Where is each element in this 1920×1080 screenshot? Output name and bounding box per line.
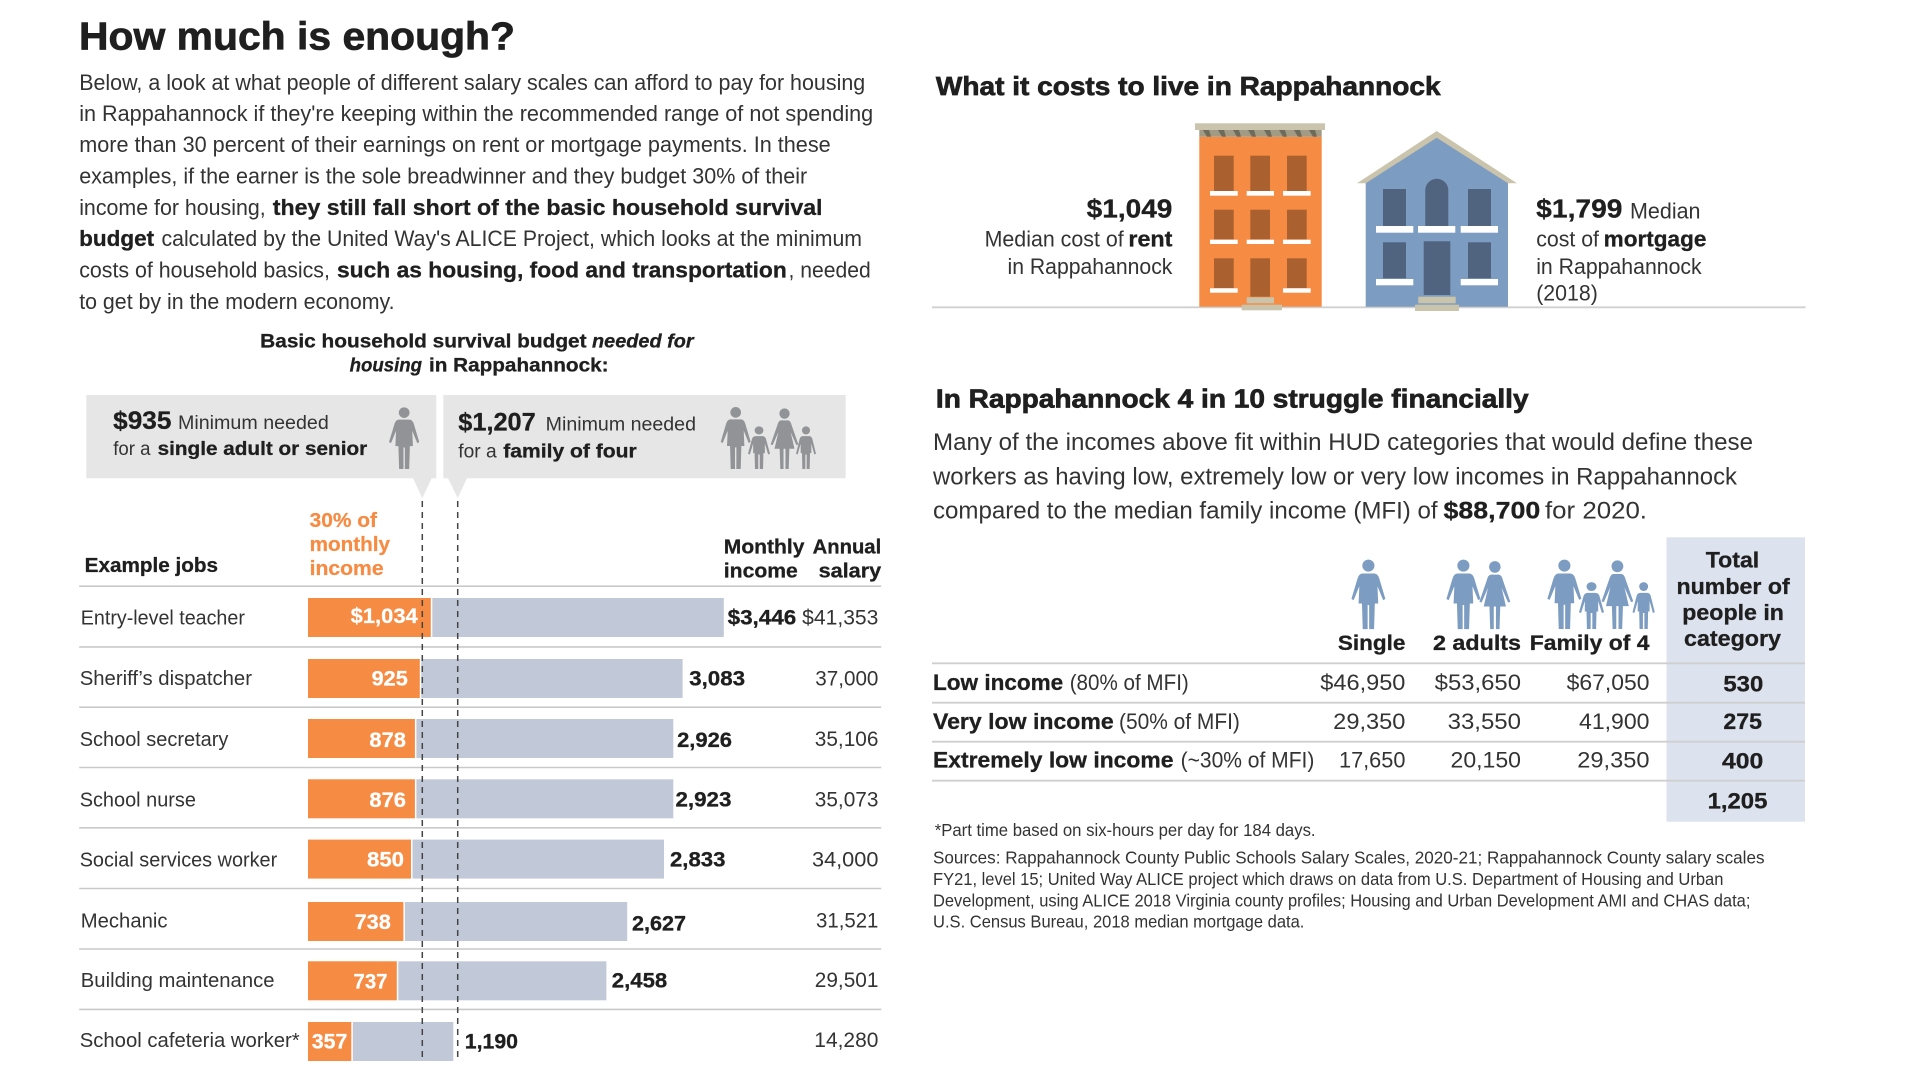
text block: HUD categories: $88,700 — [1444, 497, 1540, 524]
heading: survival budget: needed for — [592, 331, 695, 352]
column header: total people: category — [1684, 626, 1782, 651]
label: median rent: $1,049 — [1087, 194, 1172, 224]
column headers: Single — [1338, 632, 1405, 655]
row: low income: 530 — [1723, 672, 1763, 697]
label: median mortgage: in Rappahannock — [1536, 254, 1703, 279]
label: family of four: family of four — [503, 442, 637, 463]
row: very low income: 33,550 — [1448, 709, 1521, 734]
heading: survival budget — [260, 331, 695, 377]
row: mechanic: Mechanic — [81, 909, 168, 932]
title: How much is enough? — [79, 16, 515, 58]
row: school nurse — [80, 779, 878, 818]
row: entry-level teacher: $41,353 — [802, 607, 878, 630]
row: sheriff's dispatcher: 3,083 — [689, 668, 745, 691]
heading: survival budget: in Rappahannock: — [429, 356, 608, 377]
footnote: *Part time based on six-hours per day for 184 days. — [935, 820, 1316, 840]
label: median mortgage — [1536, 194, 1706, 306]
sources: Sources: Rappahannock County Public Schools Salary Scales, 2020-21; Rappahannock County salary scales — [933, 847, 1765, 867]
text block: introduction: examples, if the earner is the sole breadwinner and they budget 30% of their — [79, 164, 807, 188]
sources: FY21, level 15; United Way ALICE project which draws on data from U.S. Department of Housing and Urban — [933, 869, 1723, 889]
row: low income: Low income — [933, 670, 1063, 695]
value: 1207 dollars: $1,207 — [458, 409, 536, 437]
row: sheriff's dispatcher: 925 — [372, 668, 408, 691]
icon: orange apartment building — [1195, 123, 1325, 310]
row: sheriff's dispatcher: Sheriff’s dispatcher — [80, 667, 252, 690]
bar chart: example jobs — [79, 501, 882, 1061]
table header: 30% of — [310, 509, 377, 532]
row: low income: (80% of MFI) — [1070, 670, 1189, 695]
row: sheriff's dispatcher — [80, 659, 878, 698]
sources: Development, using ALICE 2018 Virginia county profiles; Housing and Urban Development AMI and CHAS data; — [933, 891, 1750, 911]
column headers — [1338, 632, 1650, 655]
table: income categories — [932, 537, 1805, 822]
row: mechanic — [81, 902, 878, 941]
row: extremely low income: 400 — [1722, 749, 1763, 774]
sources: U.S. Census Bureau, 2018 median mortgage data. — [933, 912, 1304, 932]
row: very low income — [933, 709, 1762, 734]
sources — [933, 847, 1765, 932]
row: low income — [933, 670, 1763, 697]
label: single adult: for a — [113, 439, 151, 460]
column header: total people — [1676, 547, 1790, 651]
table header — [85, 509, 882, 583]
text block: HUD categories: Many of the incomes above fit within HUD categories that would define these — [933, 429, 1753, 456]
text block: introduction: calculated by the United Way's ALICE Project, which looks at the minimum — [162, 226, 862, 251]
text block: introduction: to get by in the modern economy. — [79, 289, 395, 314]
table header: Example jobs — [85, 554, 218, 577]
label: median rent: Median cost of — [985, 227, 1125, 252]
text block: HUD categories — [932, 429, 1753, 524]
row: very low income: 275 — [1723, 709, 1762, 734]
row: school secretary: 878 — [369, 729, 406, 752]
text block: introduction: , needed — [788, 258, 871, 282]
label: median mortgage: mortgage — [1604, 227, 1706, 252]
row: school cafeteria worker — [80, 1022, 878, 1061]
row: school cafeteria worker: 357 — [312, 1031, 347, 1054]
row: school secretary: School secretary — [80, 728, 229, 751]
icon: two adults — [1446, 560, 1510, 629]
table header: income — [724, 560, 798, 583]
table header: income — [310, 557, 384, 580]
heading: 4 in 10 struggle: In Rappahannock 4 in 10 struggle financially — [936, 383, 1529, 413]
row: social services worker: Social services worker — [80, 848, 277, 871]
row: social services worker: 2,833 — [670, 848, 725, 871]
row: social services worker: 850 — [367, 848, 404, 871]
row: extremely low income: (~30% of MFI) — [1181, 748, 1314, 773]
icon: single person — [389, 407, 419, 469]
row: very low income: 29,350 — [1333, 709, 1405, 734]
label: single adult: single adult or senior — [158, 439, 368, 460]
label: median rent: rent — [1128, 227, 1173, 252]
row: school nurse: 876 — [369, 789, 406, 812]
icon: family of four — [1547, 560, 1655, 629]
icon: family of four — [721, 407, 816, 469]
heading: what it costs to live: What it costs to live in Rappahannock — [936, 71, 1441, 101]
panel: family of four minimum — [443, 395, 846, 498]
row: entry-level teacher: $3,446 — [728, 607, 796, 630]
label: median mortgage: (2018) — [1536, 281, 1598, 306]
row: low income: $67,050 — [1567, 670, 1650, 695]
label: median rent: in Rappahannock — [1008, 254, 1173, 279]
table header: salary — [819, 560, 882, 583]
row: building maintenance: Building maintenance — [81, 969, 274, 992]
row: entry-level teacher — [81, 598, 878, 637]
threshold lines: single adult and family of four — [422, 501, 458, 1061]
row: low income: $46,950 — [1320, 670, 1405, 695]
row: building maintenance: 29,501 — [815, 969, 878, 992]
row: low income: $53,650 — [1435, 670, 1521, 695]
text block: HUD categories: for 2020. — [1545, 497, 1647, 524]
text block: introduction: more than 30 percent of their earnings on rent or mortgage payments. In these — [79, 132, 831, 157]
row: school cafeteria worker: School cafeteria worker* — [80, 1029, 300, 1052]
value: 935 dollars: $935 — [113, 407, 171, 435]
row: extremely low income: 29,350 — [1577, 748, 1650, 773]
row: social services worker — [80, 840, 878, 879]
label: median mortgage: Median — [1630, 198, 1700, 223]
row: building maintenance: 737 — [354, 970, 388, 993]
row: building maintenance: 2,458 — [612, 970, 668, 993]
row: school cafeteria worker: 1,190 — [465, 1031, 518, 1054]
text block: introduction: in Rappahannock if they're keeping within the recommended range of not spending — [79, 101, 873, 126]
text block: HUD categories: workers as having low, extremely low or very low incomes in Rappahannock — [932, 463, 1738, 490]
row: mechanic: 738 — [355, 911, 391, 934]
row: extremely low income: 20,150 — [1450, 748, 1521, 773]
row: very low income: (50% of MFI) — [1119, 709, 1240, 734]
row: building maintenance — [81, 961, 878, 1000]
label: family of four — [458, 442, 637, 463]
row: school cafeteria worker: 14,280 — [814, 1029, 878, 1052]
text block: introduction: costs of household basics, — [79, 258, 330, 282]
panel: housing costs illustration — [932, 123, 1806, 311]
label: median mortgage: $1,799 — [1536, 194, 1622, 224]
text block: introduction: they still fall short of the basic household survival — [273, 195, 822, 220]
row: school secretary — [80, 719, 878, 758]
row: extremely low income — [933, 748, 1763, 774]
text block: introduction: income for housing, — [79, 195, 266, 220]
heading: survival budget: housing — [350, 356, 422, 377]
table header: Monthly — [724, 536, 805, 559]
panel: single adult minimum — [86, 395, 436, 498]
label: median mortgage: cost of — [1536, 227, 1600, 252]
row: very low income: Very low income — [933, 709, 1114, 734]
column headers: 2 adults — [1433, 632, 1521, 655]
text block: introduction — [79, 70, 873, 314]
row: school nurse: 35,073 — [815, 788, 878, 811]
table header: monthly — [310, 533, 391, 556]
label: median rent — [985, 194, 1173, 279]
text block: introduction: Below, a look at what people of different salary scales can afford to pay for housing — [79, 70, 865, 95]
column header: total people: people in — [1682, 600, 1784, 625]
label: minimum needed: Minimum needed — [546, 415, 696, 436]
row: social services worker: 34,000 — [812, 848, 878, 871]
row: mechanic: 31,521 — [816, 909, 878, 932]
label: minimum needed: Minimum needed — [178, 413, 329, 434]
row: school secretary: 35,106 — [815, 728, 878, 751]
heading: survival budget: Basic household survival budget — [260, 331, 587, 352]
row: school secretary: 2,926 — [677, 729, 732, 752]
row: school nurse: School nurse — [80, 788, 196, 811]
row: extremely low income: Extremely low income — [933, 748, 1174, 773]
column header: total people: Total — [1706, 547, 1759, 572]
table header: Annual — [813, 536, 881, 559]
column header: total people: number of — [1676, 574, 1790, 599]
icon: single — [1351, 560, 1385, 629]
row: very low income: 41,900 — [1579, 709, 1650, 734]
column headers: Family of 4 — [1530, 632, 1650, 655]
row: sheriff's dispatcher: 37,000 — [815, 668, 878, 691]
label: family of four: for a — [458, 442, 497, 463]
row: mechanic: 2,627 — [632, 912, 686, 935]
row: entry-level teacher: $1,034 — [351, 605, 418, 628]
text block: introduction: such as housing, food and transportation — [337, 258, 787, 282]
row: extremely low income: 17,650 — [1339, 748, 1405, 773]
row: entry-level teacher: Entry-level teacher — [81, 607, 245, 630]
text block: HUD categories: compared to the median family income (MFI) of — [933, 497, 1438, 524]
row: school nurse: 2,923 — [676, 788, 731, 811]
text block: introduction: budget — [79, 226, 155, 251]
icon: blue house — [1357, 131, 1517, 311]
total count: 1,205 — [1708, 789, 1767, 814]
